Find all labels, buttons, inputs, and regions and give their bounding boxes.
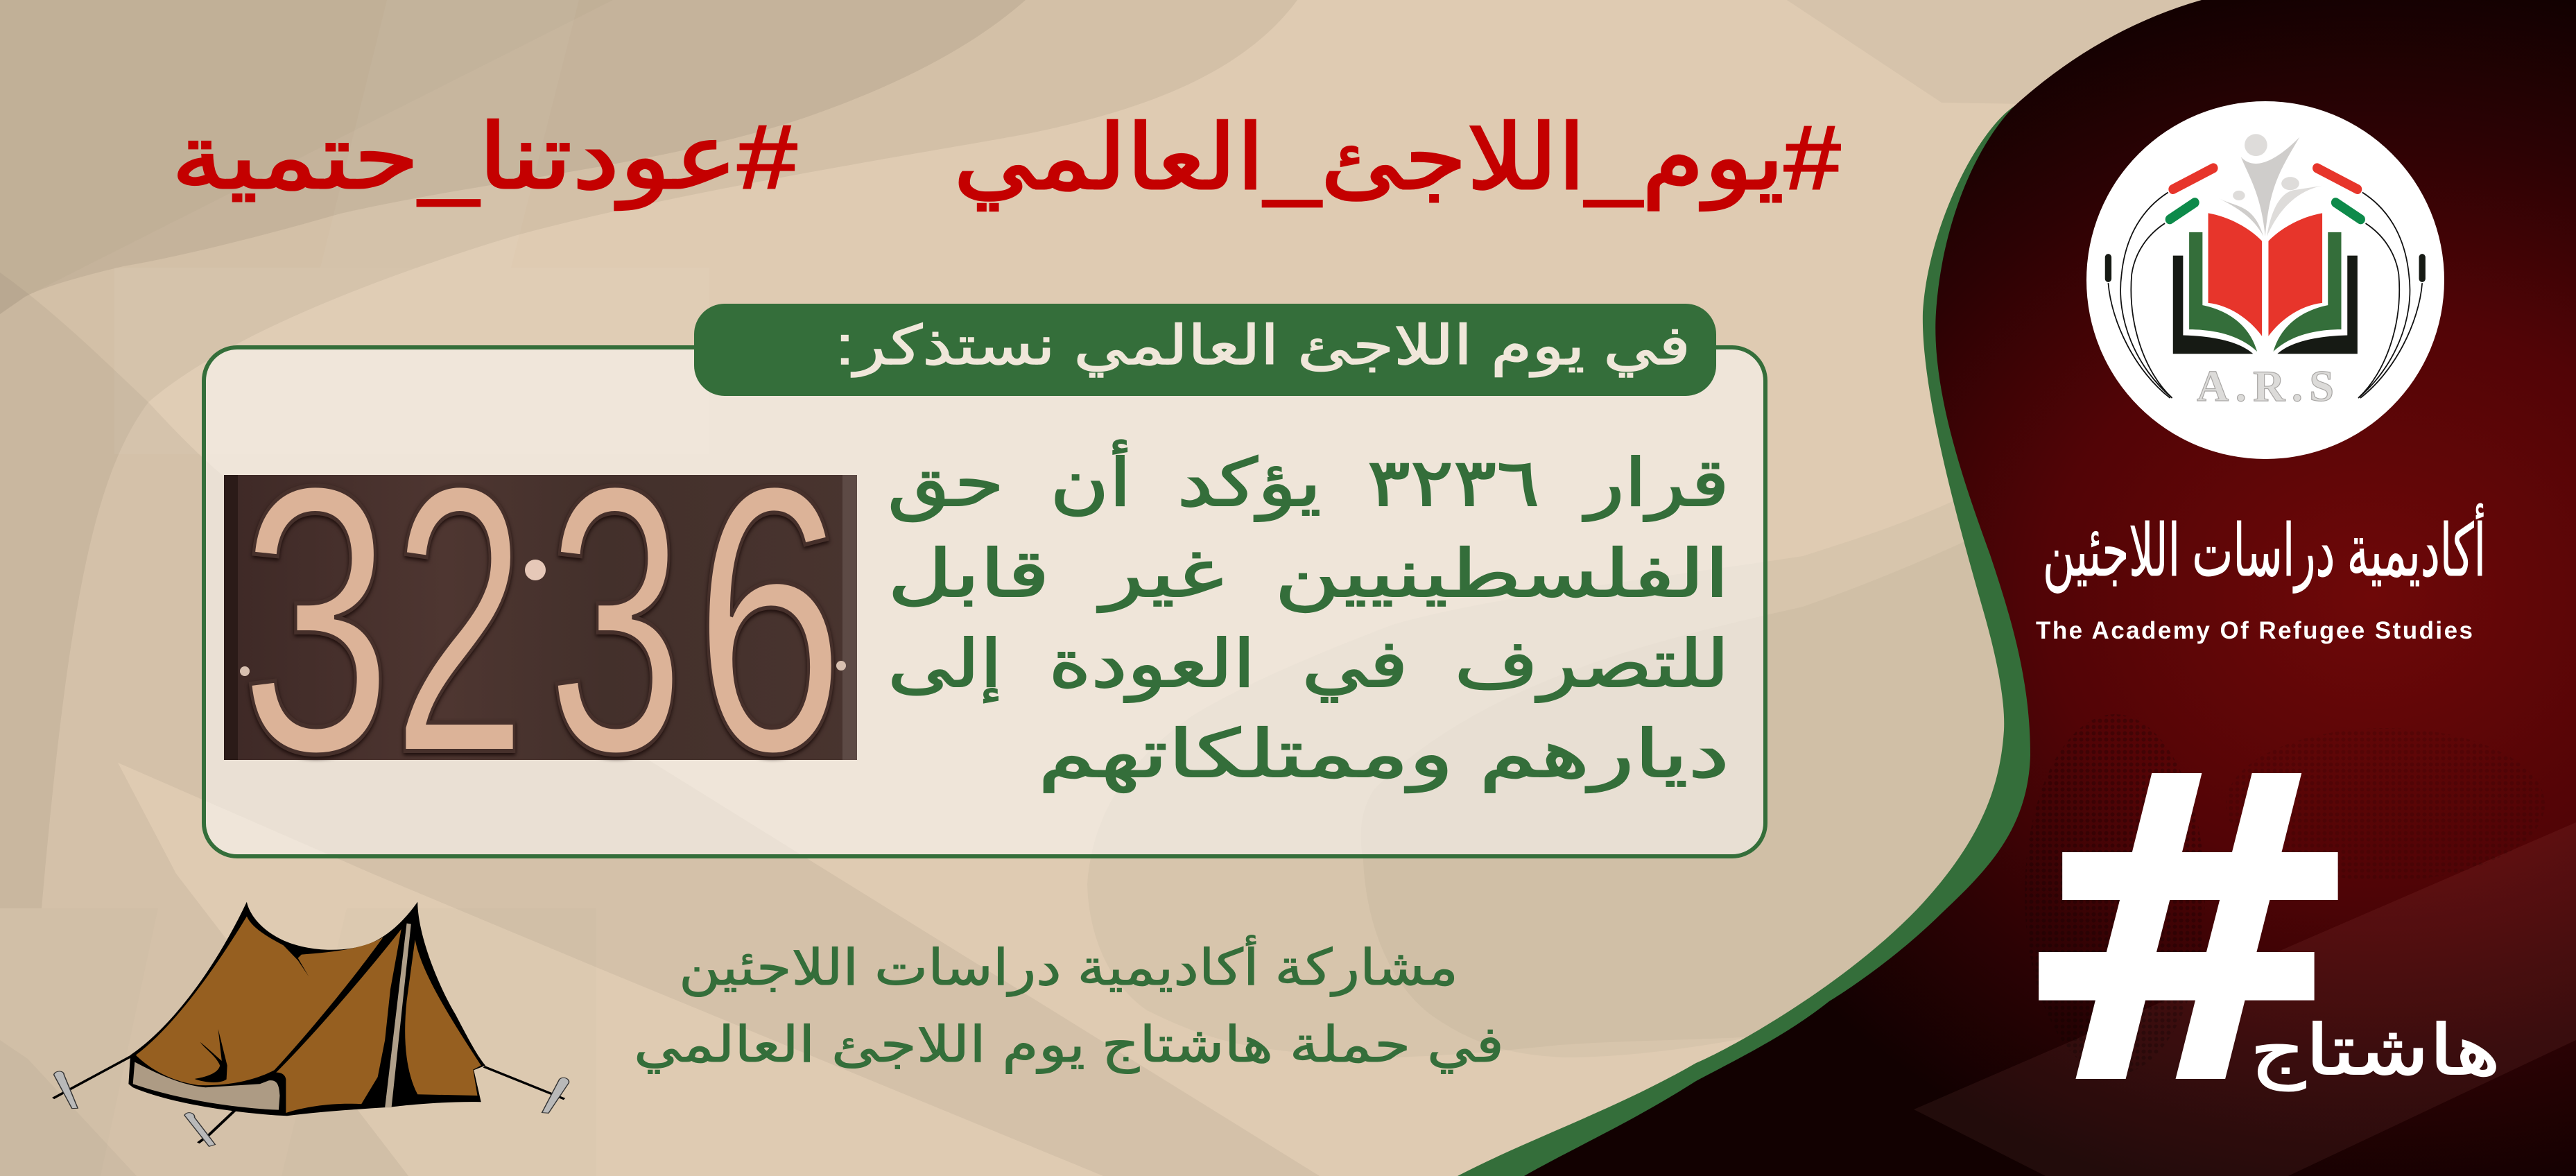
dark red side panel — [1524, 0, 2576, 1176]
body text: resolution statement: للتصرف في العودة إلى — [888, 628, 1729, 703]
participation caption: في حملة هاشتاج يوم اللاجئ العالمي — [634, 1017, 1504, 1074]
title: hashtag world refugee day: #يوم_اللاجئ_العالمي — [953, 107, 1840, 211]
panel: resolution 3236 — [204, 347, 1765, 856]
logo caption: English name: The Academy Of Refugee Studies — [2036, 617, 2473, 644]
photo: number plate 3236: 6 — [694, 408, 845, 832]
panel heading pill — [694, 304, 1716, 396]
green crescent edge — [1458, 106, 2080, 1176]
body text: resolution statement: الفلسطينيين غير قابل — [888, 537, 1729, 612]
icon: tent — [53, 902, 569, 1146]
photo: number plate 3236: 3 — [240, 408, 392, 832]
logo: book and reeds — [2108, 134, 2422, 398]
participation caption — [634, 935, 1504, 1074]
title: hashtag return: #عودتنا_حتمية — [171, 106, 797, 210]
panel heading pill: في يوم اللاجئ العالمي نستذكر: — [836, 315, 1691, 378]
red panel texture — [1914, 714, 2576, 1176]
icon: large hash sign: # — [2012, 686, 2365, 1176]
photo: number plate 3236 — [224, 408, 857, 832]
body text: resolution statement: ديارهم وممتلكاتهم — [1038, 718, 1729, 793]
logo: A.R.S initials: A.R.S — [2197, 361, 2334, 410]
photo: number plate 3236: 2 — [392, 408, 526, 832]
hashtag word: هاشتاج — [2250, 1012, 2500, 1091]
photo: number plate 3236: 3 — [547, 408, 684, 832]
participation caption: مشاركة أكاديمية دراسات اللاجئين — [679, 935, 1458, 997]
body text: resolution statement — [888, 440, 1729, 793]
logo: white circle emblem — [2086, 101, 2444, 459]
body text: resolution statement: قرار ٣٢٣٦ يؤكد أن حق — [888, 440, 1729, 521]
